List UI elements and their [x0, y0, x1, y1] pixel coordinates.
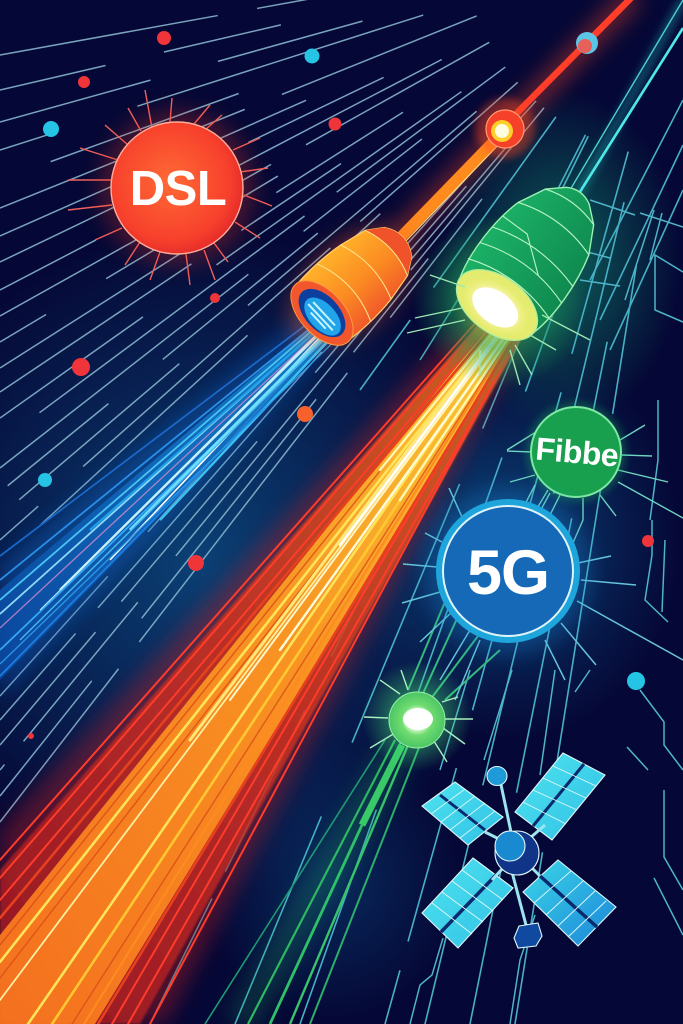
DSL label: DSL — [130, 162, 226, 216]
speed lines: lower and right fan — [150, 0, 683, 1024]
circuit traces: right side — [410, 200, 683, 1024]
Fibre badge — [507, 402, 683, 545]
red data dots — [28, 31, 654, 739]
red relay node — [475, 98, 535, 158]
green connector — [379, 140, 651, 422]
solar panel: lower left — [422, 858, 513, 948]
DSL badge — [68, 90, 272, 285]
Fibre rays — [507, 425, 683, 545]
satellite arms — [485, 780, 545, 925]
Fibre label: Fibbe — [534, 431, 620, 474]
solar panel: upper right — [515, 753, 605, 840]
burst rays — [364, 670, 473, 762]
connector spark rays — [407, 275, 590, 385]
satellite antenna dish — [487, 766, 507, 786]
green beam — [205, 590, 500, 1024]
satellite lower module — [514, 923, 542, 948]
5G badge — [402, 487, 683, 700]
satellite hub — [495, 831, 539, 875]
red and orange top beam — [398, 0, 634, 242]
orange and yellow main beam — [0, 315, 530, 1024]
5G rays — [402, 488, 683, 700]
teal fibre beam — [570, 0, 683, 195]
blue red relay node — [576, 32, 598, 54]
green light burst — [362, 661, 473, 771]
orange connector — [266, 202, 436, 369]
solar panel: lower right — [523, 860, 616, 946]
DSL rays — [68, 90, 272, 285]
satellite — [422, 753, 616, 948]
blue beam — [0, 300, 352, 700]
solar panel: upper left — [422, 782, 503, 845]
cyan data dots — [38, 48, 645, 690]
5G label: 5G — [467, 538, 549, 608]
